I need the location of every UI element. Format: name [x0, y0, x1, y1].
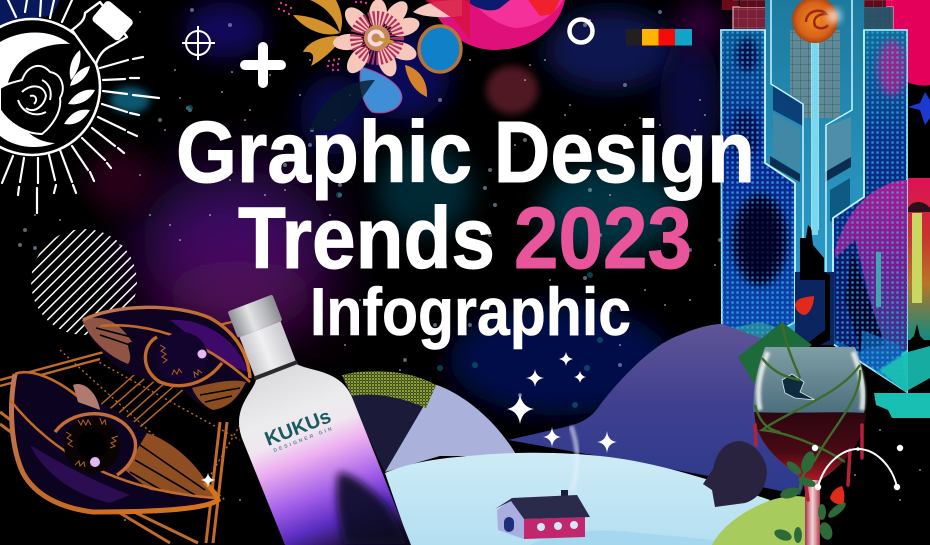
pale lilac hill — [385, 384, 517, 472]
red and pink glow behind tower — [722, 0, 930, 125]
title line 2: Trends — [238, 190, 495, 287]
flask circle outline — [0, 19, 100, 155]
subtitle: Infographic — [310, 274, 631, 350]
head silhouette — [703, 441, 767, 507]
flower inner — [18, 80, 51, 114]
right landscape strip — [908, 178, 930, 342]
rose top — [795, 296, 814, 315]
wine drips — [755, 425, 862, 500]
eye stalk hatch lines connecting the eyes — [97, 367, 186, 433]
collar ring — [254, 360, 298, 380]
brand sub-label: DESIGNER GIN — [273, 426, 333, 454]
pink leaf — [413, 0, 462, 17]
eye illustration: upper eye — [82, 307, 250, 410]
icon: crosshair — [182, 26, 215, 60]
green hill — [712, 496, 815, 545]
small sparkle on eye — [201, 473, 215, 487]
radial filaments — [360, 21, 394, 55]
striped circle — [31, 229, 137, 335]
silver cap — [228, 294, 282, 338]
blue sky behind rays — [0, 0, 60, 25]
wine glass with vines — [753, 296, 903, 545]
left tower block — [721, 30, 795, 362]
bottle neck — [239, 321, 297, 380]
glass bowl — [753, 347, 865, 480]
wing shadow — [310, 80, 375, 130]
neck, cap and label rotated with the bottle — [218, 291, 336, 455]
rose lower — [830, 486, 844, 504]
sparkle stars — [507, 352, 617, 453]
teal landscape lower right — [874, 346, 930, 418]
blue leaf — [360, 67, 402, 113]
year: 2023 — [514, 190, 692, 287]
white arc with dots — [812, 445, 903, 490]
icon: plus sign — [245, 47, 281, 83]
crescent moon — [0, 32, 70, 147]
neon tower illustration — [721, 0, 907, 392]
top box — [733, 0, 893, 30]
title line 1: Graphic Design — [176, 104, 755, 201]
snow ground shadow — [530, 531, 720, 545]
geometric orange frame — [0, 320, 240, 543]
gold coin — [792, 0, 841, 43]
petals — [332, 0, 422, 79]
left plates — [770, 85, 803, 182]
green wedge behind wine glass — [738, 322, 812, 385]
flower centre — [370, 32, 382, 44]
central column — [765, 0, 864, 345]
small orange leaf — [405, 65, 427, 97]
magenta planet top — [430, 0, 565, 50]
block interior with planet — [835, 40, 907, 392]
bottle body — [239, 364, 411, 545]
dark reflection — [337, 472, 408, 544]
title — [176, 104, 755, 350]
red side flower — [425, 0, 470, 40]
laurel leaves — [64, 50, 95, 124]
nebula colour glows — [85, 0, 725, 415]
tan corona — [364, 25, 390, 51]
botanical illustration: passion flower — [279, 0, 470, 113]
colour swatches bar — [626, 29, 692, 46]
bottle — [218, 291, 411, 545]
glass crack — [782, 374, 815, 400]
flower — [0, 66, 63, 134]
central light column — [812, 40, 818, 235]
right plates — [825, 117, 851, 222]
wine — [754, 412, 866, 480]
dark keyhole silhouette — [795, 225, 834, 345]
orange leaves — [293, 0, 342, 66]
leaves — [773, 450, 848, 543]
dark hill with green grain — [342, 371, 436, 472]
stamen — [379, 39, 392, 42]
pink dots — [279, 2, 366, 70]
icon: flask with moon and flower, radiating lines — [0, 0, 159, 213]
house — [495, 490, 590, 539]
glass highlights — [759, 352, 863, 410]
right tower block — [833, 30, 907, 392]
snow field — [385, 453, 770, 545]
blue egg fruit — [419, 26, 461, 72]
central neon lines — [765, 0, 864, 344]
icon: white ring — [570, 20, 592, 42]
flask neck — [72, 2, 127, 64]
brand name: KUKUs — [262, 405, 334, 451]
sun rays around the flask — [2, 0, 159, 213]
glass grid panel — [790, 30, 840, 118]
bottle cap — [91, 0, 134, 42]
chimney smoke — [571, 426, 577, 490]
eye illustration: lower eye — [10, 372, 218, 512]
vines — [755, 322, 860, 490]
blue-purple mountain — [508, 324, 830, 495]
glass stem — [805, 470, 820, 545]
